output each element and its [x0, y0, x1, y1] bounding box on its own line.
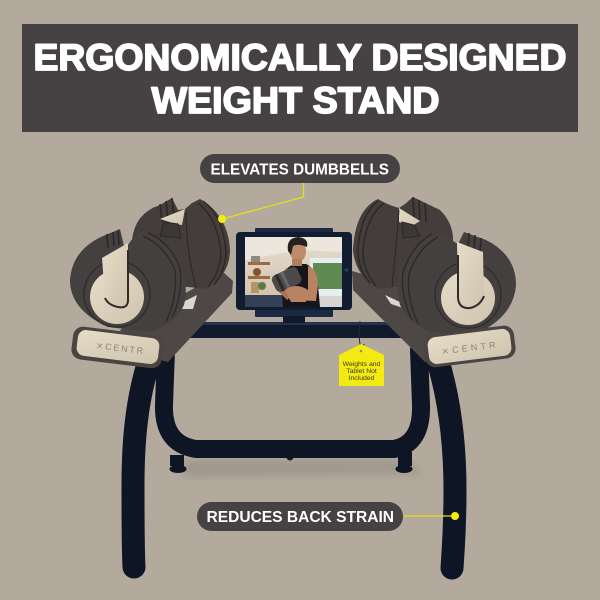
tablet	[236, 232, 352, 310]
left front dumbbell	[70, 229, 186, 332]
callout: reduces back strain: REDUCES BACK STRAIN	[206, 509, 394, 526]
callout: elevates dumbbells: ELEVATES DUMBBELLS	[210, 162, 389, 178]
right tray end cap with logo	[422, 325, 517, 368]
callout: elevates dumbbells	[200, 154, 400, 223]
stand: upper crossbar	[184, 322, 402, 338]
left rear dumbbell	[132, 198, 230, 289]
stand: front left leg	[133, 358, 150, 567]
right front dumbbell	[398, 231, 516, 333]
left tray end cap with logo	[70, 326, 165, 369]
title banner	[22, 24, 578, 132]
right tray end cap with logo: ⨯CENTR	[441, 340, 498, 356]
tablet holder	[255, 228, 333, 323]
tag: weights and tablet not included: Included	[349, 375, 375, 382]
left tray end cap with logo: ⨯CENTR	[95, 340, 145, 356]
left weight tray	[120, 272, 233, 362]
stand: rear feet	[170, 454, 412, 473]
tag: weights and tablet not included	[339, 321, 384, 386]
tablet screen: man lifting a dumbbell at home	[245, 237, 342, 307]
stand: rear U frame	[164, 350, 421, 466]
title banner: ERGONOMICALLY DESIGNED	[34, 37, 566, 78]
right rear dumbbell	[353, 197, 453, 289]
floor shadow	[180, 460, 425, 478]
stand: front right leg	[437, 358, 455, 568]
tag: weights and tablet not included: Tablet Not	[346, 368, 377, 375]
callout: reduces back strain	[197, 502, 459, 531]
right weight tray	[352, 271, 470, 362]
title banner: WEIGHT STAND	[152, 80, 440, 121]
tag: weights and tablet not included: Weights and	[343, 361, 381, 368]
